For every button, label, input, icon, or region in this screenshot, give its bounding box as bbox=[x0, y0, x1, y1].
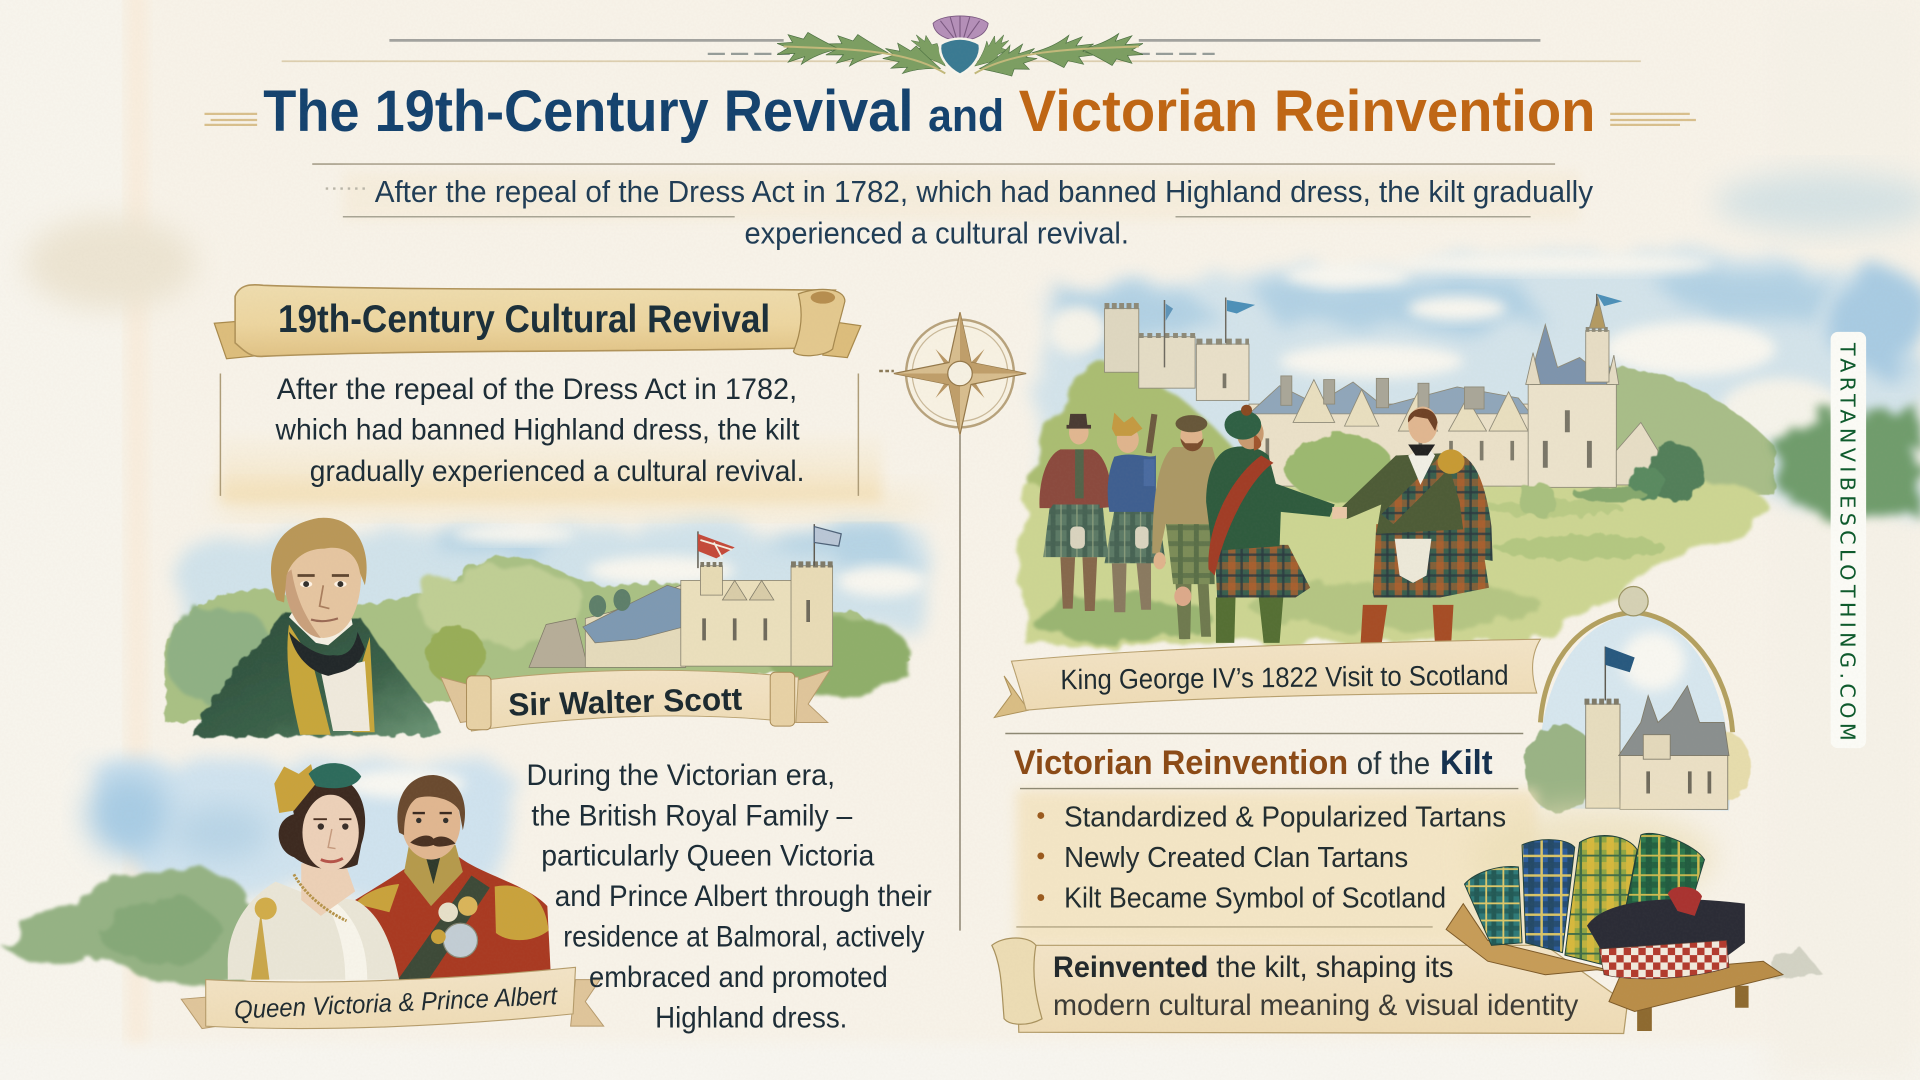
text block: Victorian era bbox=[527, 759, 932, 1034]
text block: Victorian era: residence at Balmoral, actively bbox=[563, 921, 925, 954]
section: Victorian Reinvention of the Kilt bbox=[1005, 733, 1714, 949]
banner: Queen Victoria and Prince Albert bbox=[181, 967, 604, 1029]
arch vignette with small castle bbox=[1524, 587, 1749, 813]
figure: man in green jacket shaking hands bbox=[1206, 405, 1335, 643]
rolls bbox=[1464, 833, 1704, 967]
scene: trees bbox=[1286, 433, 1704, 517]
thistle leaves bbox=[777, 29, 1143, 84]
thistle bulb bbox=[940, 39, 980, 75]
scene: Scott hills and castle bbox=[165, 524, 912, 722]
figure: man in brown coat bbox=[1039, 414, 1112, 611]
text block: Victorian era: the British Royal Family – bbox=[531, 799, 853, 832]
banner: Sir Walter Scott bbox=[441, 670, 830, 731]
ribbon: reinvented the kilt: Reinvented the kilt, shaping its bbox=[1053, 951, 1453, 984]
scene: castle on the hill bbox=[1104, 294, 1658, 487]
ribbon: reinvented the kilt: modern cultural meaning & visual identity bbox=[1053, 989, 1579, 1022]
scene: hills and forest bbox=[1019, 358, 1920, 645]
subtitle bbox=[312, 164, 1594, 251]
sky and foliage: Queen scene bbox=[0, 757, 508, 986]
Prince Albert bbox=[355, 775, 551, 980]
text block: cultural revival: which had banned Highland dress, the kilt bbox=[275, 414, 800, 447]
text block: Victorian era: Highland dress. bbox=[655, 1001, 847, 1034]
text block: cultural revival: After the repeal of the Dress Act in 1782, bbox=[277, 373, 797, 406]
banner: King George IV visit: King George IV’s 1822 Visit to Scotland bbox=[1060, 660, 1509, 695]
subtitle: After the repeal of the Dress Act in 1782, which had banned Highland dress, the kilt gradually bbox=[375, 175, 1594, 209]
text block: cultural revival bbox=[220, 373, 882, 502]
bonnet bbox=[1587, 887, 1745, 979]
title bbox=[204, 79, 1696, 144]
tartan rolls, bonnet and bench bbox=[1446, 833, 1822, 1031]
long range bbox=[1249, 404, 1531, 486]
text block: Victorian era: During the Victorian era, bbox=[527, 759, 835, 792]
figure: King George IV bbox=[1332, 407, 1493, 647]
bullet list bbox=[1037, 802, 1506, 914]
portrait: Queen Victoria and Prince Albert bbox=[228, 763, 551, 980]
banner: Queen Victoria and Prince Albert: Queen Victoria & Prince Albert bbox=[233, 982, 559, 1025]
side tag: website: TARTANVIBESCLOTHING.COM bbox=[1835, 342, 1859, 741]
section heading: of the bbox=[1357, 745, 1430, 781]
ribbon: reinvented the kilt bbox=[992, 938, 1627, 1033]
section heading: Victorian Reinvention bbox=[1014, 744, 1348, 782]
great tower bbox=[1528, 382, 1616, 487]
title: Victorian Reinvention bbox=[1019, 79, 1596, 144]
ornament: thistle crest with rules bbox=[282, 16, 1641, 84]
heading banner: 19th-Century Cultural Revival: 19th-Century Cultural Revival bbox=[278, 298, 770, 341]
text block: Victorian era: embraced and promoted bbox=[589, 961, 888, 994]
heading banner: 19th-Century Cultural Revival bbox=[214, 285, 861, 359]
subtitle: experienced a cultural revival. bbox=[744, 217, 1129, 251]
side tag: website bbox=[1831, 332, 1866, 748]
text block: Victorian era: particularly Queen Victoria bbox=[541, 840, 875, 873]
text block: Victorian era: and Prince Albert through their bbox=[555, 880, 932, 913]
banner: Sir Walter Scott: Sir Walter Scott bbox=[508, 681, 743, 723]
thistle flower bbox=[933, 16, 988, 40]
figure: man in tan coat bbox=[1152, 415, 1220, 639]
sky wash: right bbox=[1041, 173, 1920, 514]
section heading: Kilt bbox=[1440, 744, 1493, 782]
text block: cultural revival: gradually experienced a cultural revival. bbox=[310, 455, 804, 488]
portrait: Sir Walter Scott bbox=[193, 518, 443, 737]
compass rose with divider bbox=[879, 312, 1026, 931]
figure: man in blue coat bbox=[1104, 413, 1166, 612]
Queen Victoria bbox=[228, 763, 399, 980]
bullet list: Newly Created Clan Tartans bbox=[1064, 842, 1408, 874]
bullet list: Standardized & Popularized Tartans bbox=[1064, 802, 1506, 834]
title: and bbox=[928, 90, 1004, 141]
title: The 19th-Century Revival bbox=[263, 79, 913, 144]
banner: King George IV visit bbox=[994, 639, 1540, 718]
bullet list: Kilt Became Symbol of Scotland bbox=[1064, 882, 1446, 914]
wooden bench bbox=[1446, 904, 1783, 1031]
sky wash: Scott scene bbox=[184, 484, 943, 637]
